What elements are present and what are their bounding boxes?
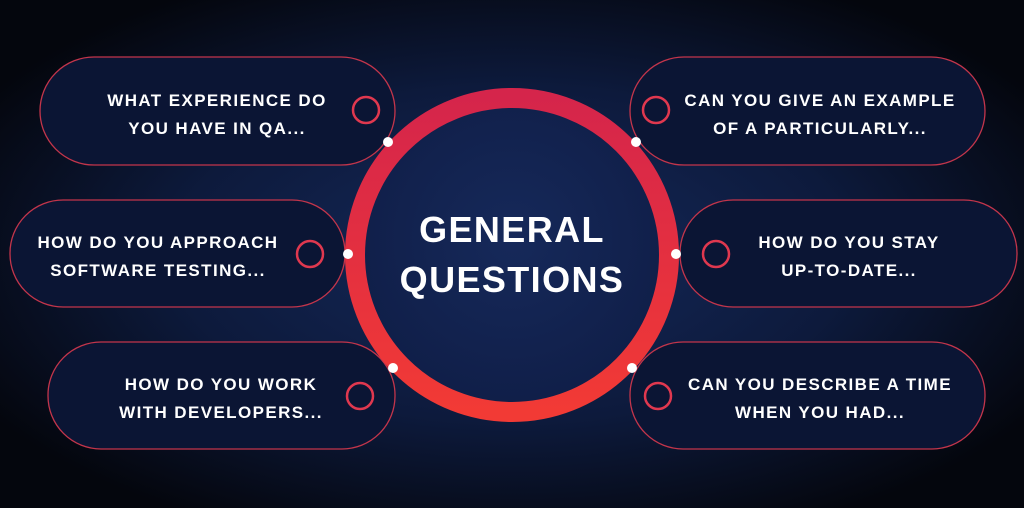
pill: describe a time bbox=[630, 342, 985, 449]
pill: approach software testing bbox=[10, 200, 345, 307]
title: QUESTIONS bbox=[400, 259, 624, 300]
pill: approach software testing: SOFTWARE TESTING... bbox=[50, 261, 266, 280]
pill: work with developers: WITH DEVELOPERS... bbox=[119, 403, 323, 422]
pill: stay up-to-date: UP-TO-DATE... bbox=[781, 261, 917, 280]
pill: give an example: OF A PARTICULARLY... bbox=[713, 119, 927, 138]
pill: stay up-to-date: HOW DO YOU STAY bbox=[758, 233, 940, 252]
title bbox=[400, 209, 624, 300]
pill: describe a time: WHEN YOU HAD... bbox=[735, 403, 905, 422]
pill: work with developers: HOW DO YOU WORK bbox=[125, 375, 317, 394]
pill: describe a time: CAN YOU DESCRIBE A TIME bbox=[688, 375, 952, 394]
pill: what experience bbox=[40, 57, 395, 165]
pill: work with developers bbox=[48, 342, 395, 449]
title: GENERAL bbox=[419, 209, 605, 250]
central ring bbox=[343, 98, 681, 412]
pill: give an example: CAN YOU GIVE AN EXAMPLE bbox=[684, 91, 956, 110]
pill: give an example bbox=[630, 57, 985, 165]
pill: approach software testing: HOW DO YOU APPROACH bbox=[37, 233, 279, 252]
pill: what experience: WHAT EXPERIENCE DO bbox=[107, 91, 327, 110]
pill: what experience: YOU HAVE IN QA... bbox=[128, 119, 306, 138]
pill: stay up-to-date bbox=[680, 200, 1017, 307]
